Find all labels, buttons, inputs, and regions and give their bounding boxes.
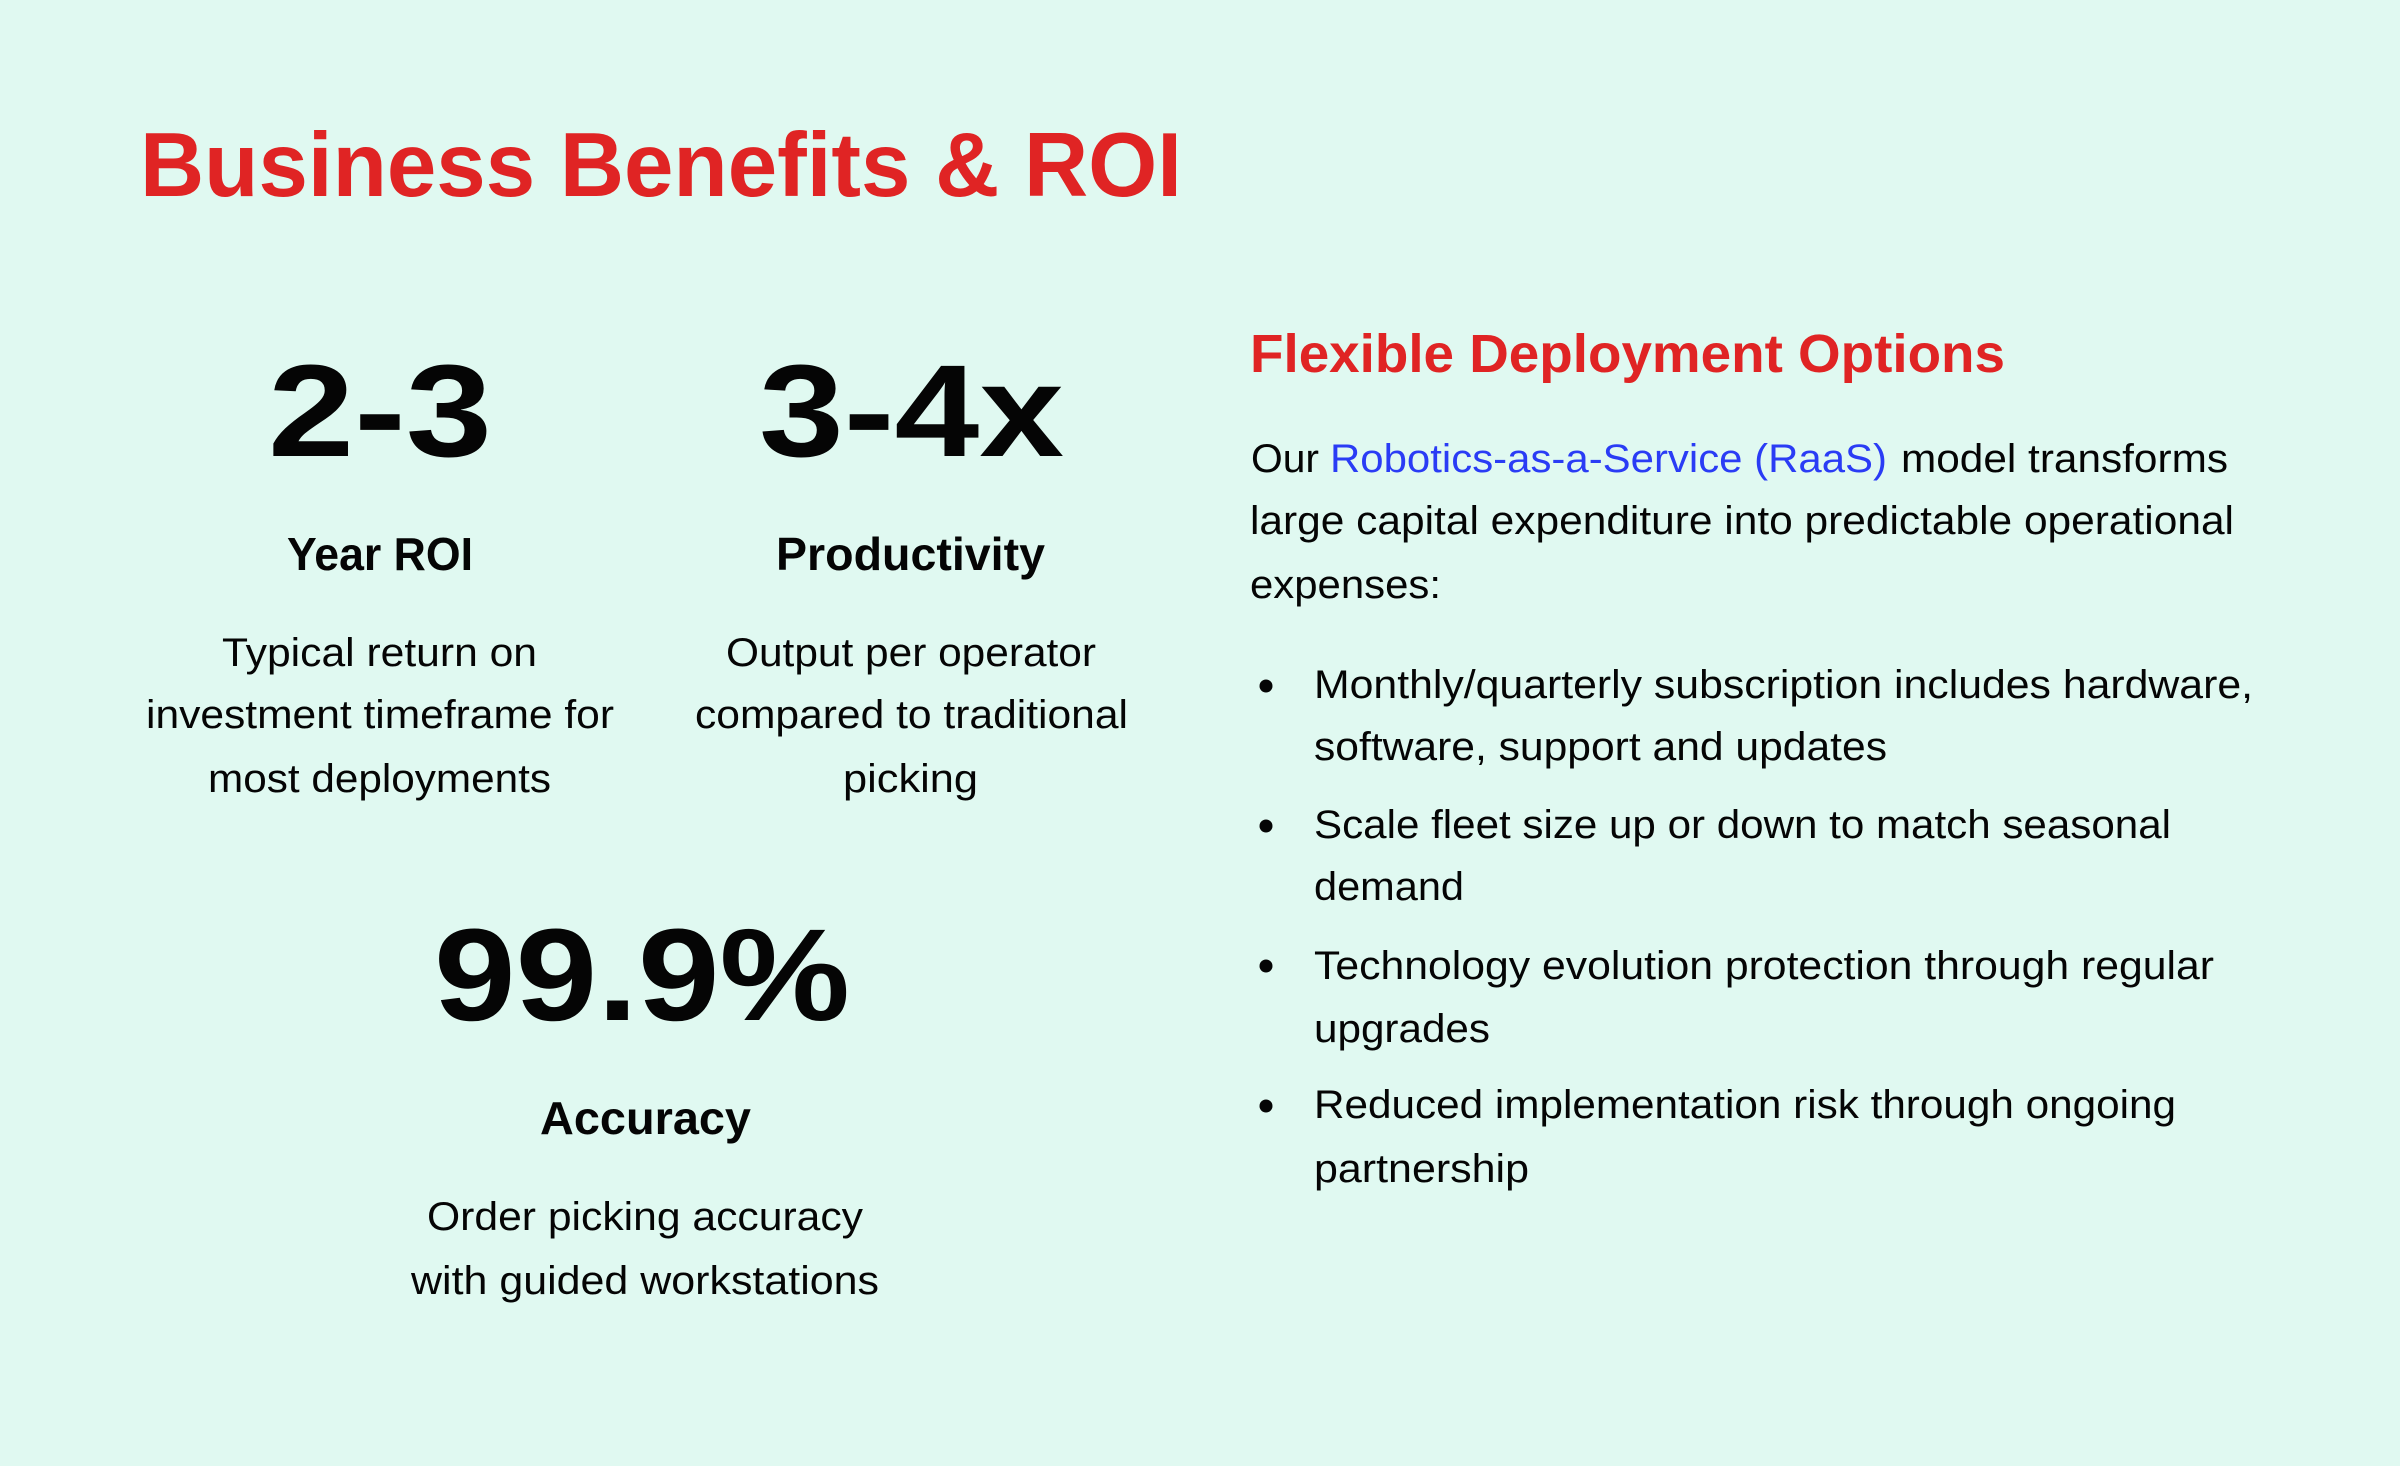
bullet 4: Reduced implementation risk through ongoing xyxy=(1314,1083,2176,1127)
description: Year ROI xyxy=(146,631,614,801)
intro paragraph: Our xyxy=(1251,437,1319,481)
metric: accuracy xyxy=(410,901,879,1303)
bullet 2: Scale fleet size up or down to match seasonal xyxy=(1314,803,2171,847)
description: Productivity xyxy=(695,631,1128,801)
number: 3-4x: 3-4x xyxy=(759,337,1064,484)
title: Business Benefits & ROI xyxy=(140,115,1182,216)
metric: productivity xyxy=(695,337,1128,801)
intro paragraph: Robotics-as-a-Service (RaaS) xyxy=(1330,437,1887,481)
bullet 3: upgrades xyxy=(1314,1007,1490,1051)
metric: year ROI xyxy=(146,337,614,801)
bullet 1: Monthly/quarterly subscription includes hardware, xyxy=(1314,663,2253,707)
label: Year ROI: Year ROI xyxy=(287,528,473,580)
bullet 2: demand xyxy=(1314,865,1464,909)
bullet 3: Technology evolution protection through regular xyxy=(1314,944,2214,988)
bullet list xyxy=(1260,663,2253,1191)
description: Year ROI: Typical return on xyxy=(222,631,537,675)
description: Productivity: compared to traditional xyxy=(695,693,1128,737)
description: Year ROI: investment timeframe for xyxy=(146,693,614,737)
bullet 3 xyxy=(1260,944,2214,1051)
intro paragraph: model transforms xyxy=(1901,437,2228,481)
panel: metrics xyxy=(146,337,1128,1303)
description: Accuracy: with guided workstations xyxy=(410,1259,879,1303)
number: 2-3: 2-3 xyxy=(268,337,492,484)
description: Accuracy: Order picking accuracy xyxy=(427,1195,863,1239)
panel: flexible deployment xyxy=(1250,324,2253,1191)
intro paragraph: large capital expenditure into predictable operational xyxy=(1250,499,2234,543)
number: 99.9%: 99.9% xyxy=(434,901,850,1048)
bullet 1: software, support and updates xyxy=(1314,725,1887,769)
heading: Flexible Deployment Options: Flexible Deployment Options xyxy=(1250,324,2005,384)
bullet 4: partnership xyxy=(1314,1147,1529,1191)
description: Productivity: Output per operator xyxy=(726,631,1096,675)
description: Year ROI: most deployments xyxy=(208,757,551,801)
bullet 4 xyxy=(1260,1083,2176,1191)
description: Productivity: picking xyxy=(843,757,978,801)
label: Productivity: Productivity xyxy=(776,528,1045,580)
label: Accuracy: Accuracy xyxy=(540,1092,751,1144)
intro paragraph xyxy=(1250,437,2234,607)
intro paragraph: expenses: xyxy=(1250,563,1441,607)
bullet 1 xyxy=(1260,663,2253,769)
description: Accuracy xyxy=(410,1195,879,1303)
bullet 2 xyxy=(1260,803,2171,909)
